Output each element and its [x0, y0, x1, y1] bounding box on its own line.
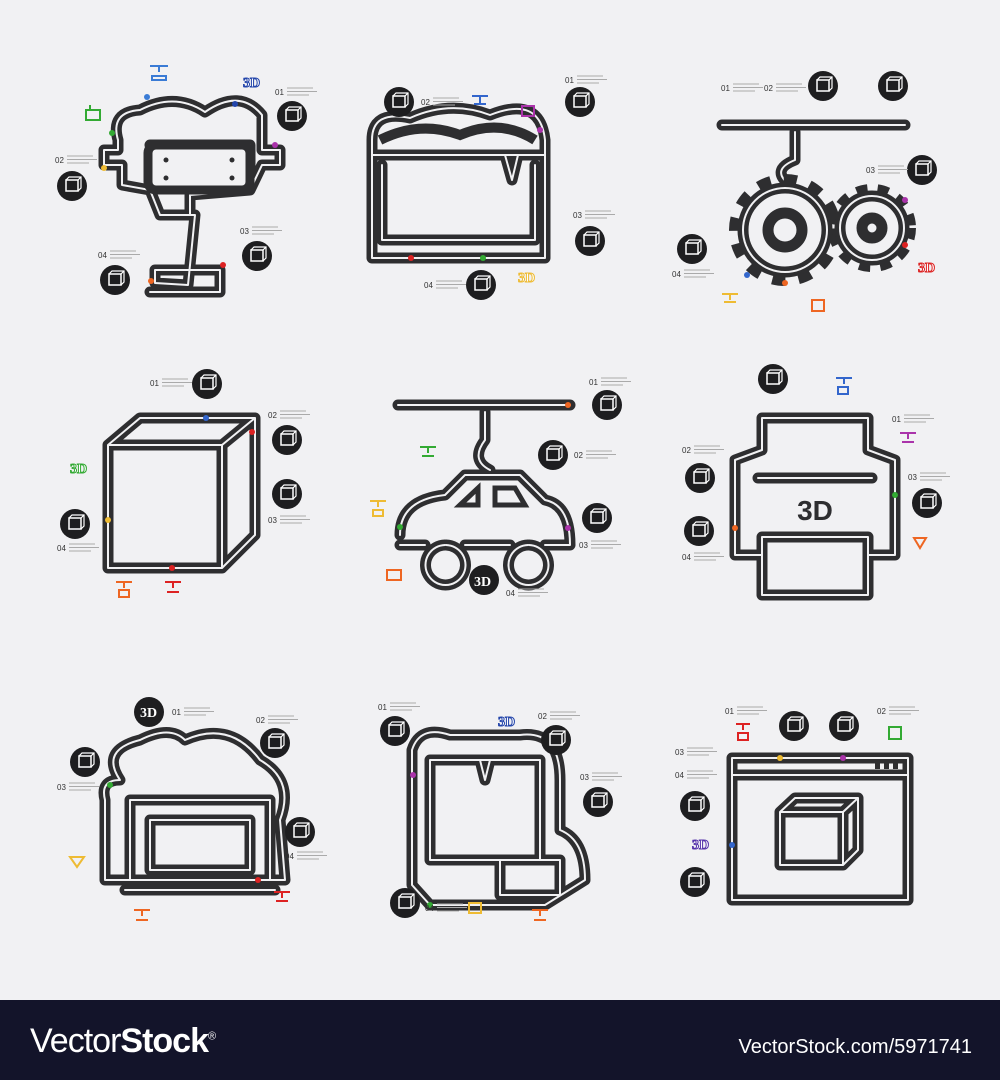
step numbers: 04 [506, 589, 515, 598]
panel 1 drawing [104, 101, 280, 292]
step numbers: 04 [98, 251, 107, 260]
step numbers: 02 [538, 712, 547, 721]
step numbers: 01 [565, 76, 574, 85]
step numbers: 02 [877, 707, 886, 716]
step numbers: 03 [573, 211, 582, 220]
step numbers: 03 [866, 166, 875, 175]
step numbers: 03 [579, 541, 588, 550]
3D labels [70, 76, 935, 853]
step numbers: 03 [675, 748, 684, 757]
caption placeholder lines [67, 76, 950, 911]
step numbers: 03 [57, 783, 66, 792]
panel 7 drawing [104, 732, 285, 890]
step numbers: 01 [378, 703, 387, 712]
panel 4 drawing [108, 418, 255, 568]
step numbers: 04 [425, 904, 434, 913]
step numbers: 03 [240, 227, 249, 236]
3D labels: 3D [140, 706, 157, 721]
panel 9 drawing [732, 758, 908, 900]
panel 6 drawing [735, 418, 895, 595]
step numbers: 03 [580, 773, 589, 782]
footer url: VectorStock.com/5971741 [739, 1036, 972, 1058]
3D labels: 3D [692, 838, 709, 853]
step numbers: 02 [256, 716, 265, 725]
3D labels: 3D [498, 715, 515, 730]
step numbers: 02 [268, 411, 277, 420]
step numbers: 04 [285, 852, 294, 861]
footer logo: VectorStock® [30, 1022, 215, 1060]
step numbers: 01 [725, 707, 734, 716]
step numbers: 04 [424, 281, 433, 290]
step numbers: 03 [908, 473, 917, 482]
panel 8 drawing [412, 732, 585, 905]
3D labels: 3D [474, 575, 491, 590]
3D labels: 3D [70, 462, 87, 477]
step numbers: 01 [150, 379, 159, 388]
step numbers: 01 [172, 708, 181, 717]
3D labels: 3D [918, 261, 935, 276]
step numbers: 01 [721, 84, 730, 93]
step numbers: 04 [57, 544, 66, 553]
colored dots [101, 94, 908, 908]
step numbers: 01 [892, 415, 901, 424]
3D labels: 3D [243, 76, 260, 91]
step numbers: 04 [675, 771, 684, 780]
step numbers: 02 [574, 451, 583, 460]
panel 5 drawing [398, 405, 570, 585]
icon badges [57, 71, 942, 918]
step numbers: 02 [682, 446, 691, 455]
step numbers: 04 [682, 553, 691, 562]
step numbers: 02 [55, 156, 64, 165]
step numbers: 01 [589, 378, 598, 387]
small colored icons [70, 66, 926, 920]
3D labels: 3D [518, 271, 535, 286]
footer [0, 1000, 1000, 1080]
step numbers: 03 [268, 516, 277, 525]
panel 3 drawing [722, 125, 911, 280]
panel 6 drawing: 3D [797, 495, 833, 526]
step numbers [55, 76, 917, 913]
panel 2 drawing [372, 108, 545, 258]
step numbers: 04 [672, 270, 681, 279]
step numbers: 02 [421, 98, 430, 107]
step numbers: 01 [275, 88, 284, 97]
step numbers: 02 [764, 84, 773, 93]
